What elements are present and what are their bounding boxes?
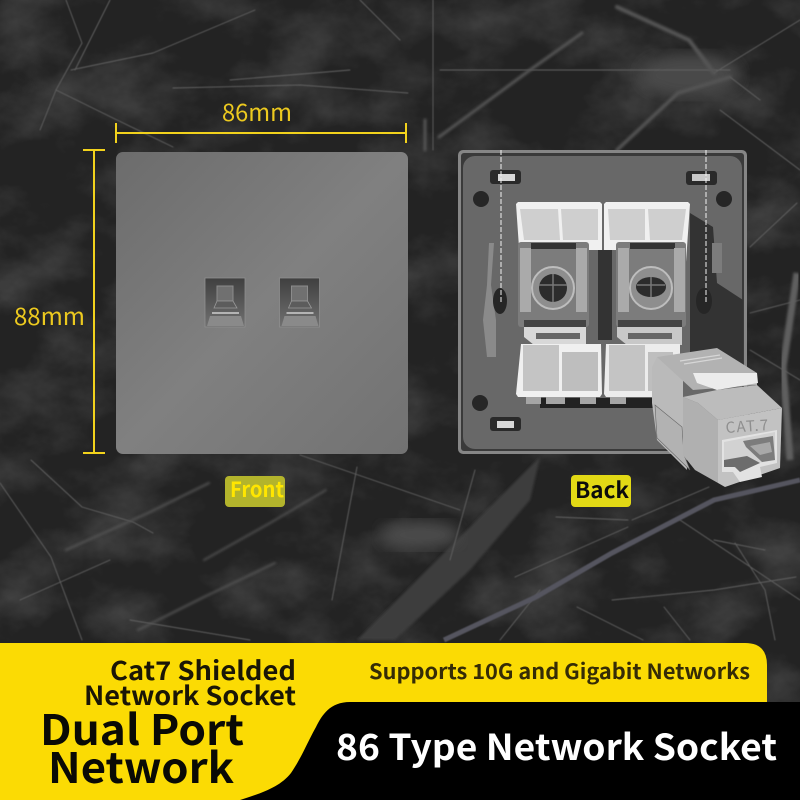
heading: Dual Port Network: Dual Port <box>40 697 244 758</box>
keystone front <box>718 408 782 487</box>
mounting clips <box>490 170 717 431</box>
keystone left side <box>652 357 687 470</box>
screw holes <box>472 191 732 411</box>
illustration: Cat7 keystone module <box>652 348 782 487</box>
heading: Cat7 Shielded Network Socket <box>84 651 296 713</box>
right metal shield <box>616 242 686 327</box>
heading: Dual Port Network: Network <box>48 735 235 796</box>
right lower white module <box>604 344 680 397</box>
keystone side column <box>683 397 718 483</box>
banner: black <box>240 702 800 800</box>
heading: Cat7 Shielded Network Socket: Network Socket <box>84 676 296 713</box>
RJ45 opening <box>722 430 777 482</box>
dimension: width 86mm: 86mm <box>222 93 292 128</box>
right upper white module <box>604 202 690 262</box>
left upper white module <box>516 202 602 262</box>
panel: front socket plate <box>116 152 408 454</box>
left lower white module <box>516 344 602 397</box>
banner: yellow <box>0 643 767 800</box>
panel: back socket plate <box>458 150 747 454</box>
dimension: width 86mm <box>116 93 406 143</box>
label: Front: Front <box>230 474 284 504</box>
heading: Dual Port Network <box>40 697 244 796</box>
latch bars <box>524 320 682 345</box>
feet <box>526 397 626 404</box>
illustration: Cat7 keystone module: CAT.7 <box>725 414 770 438</box>
heading: Cat7 Shielded Network Socket: Cat7 Shielded <box>110 651 296 688</box>
left metal shield <box>518 242 589 327</box>
network port left <box>205 278 245 327</box>
pale band <box>357 457 540 640</box>
dimension: height 88mm <box>14 150 105 453</box>
heading: 86 Type Network Socket: 86 Type Network Socket <box>336 719 777 771</box>
keystone top <box>657 348 757 390</box>
dimension: height 88mm: 88mm <box>14 297 85 332</box>
label: Back: Back <box>575 473 630 505</box>
text: Supports 10G and Gigabit Networks: Supports 10G and Gigabit Networks <box>369 656 750 686</box>
shadow behind modules <box>690 213 743 370</box>
side ridges <box>483 243 496 357</box>
guide dashed lines <box>501 150 706 304</box>
network port right <box>280 278 320 327</box>
